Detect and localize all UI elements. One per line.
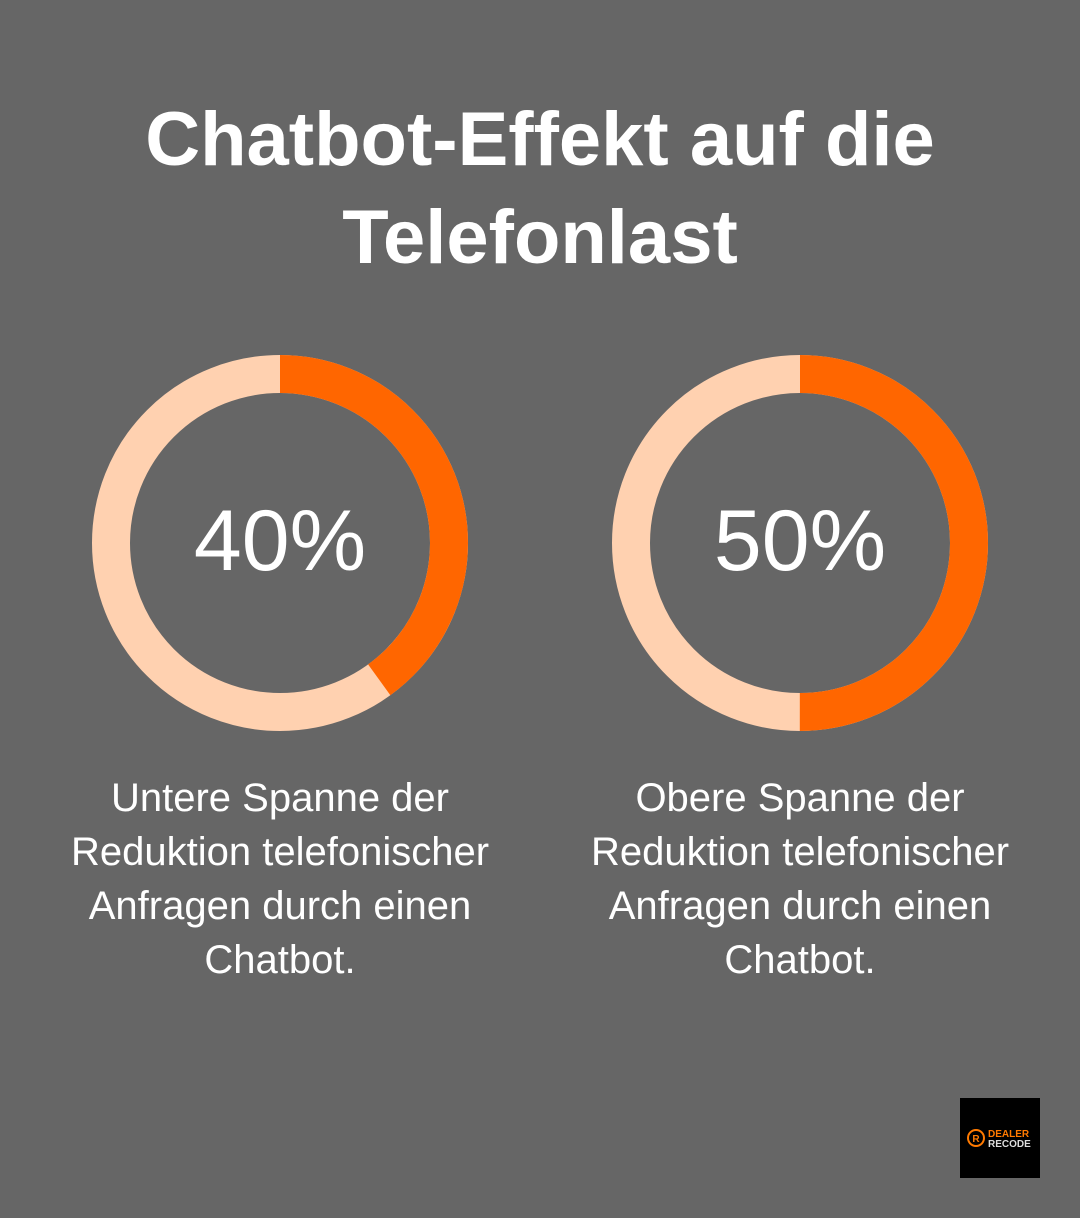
caption right: Reduktion telefonischer bbox=[591, 830, 1009, 874]
caption left bbox=[71, 776, 489, 982]
logo: R bbox=[972, 1134, 980, 1145]
caption right: Obere Spanne der bbox=[635, 776, 965, 820]
caption left: Anfragen durch einen bbox=[89, 884, 471, 928]
caption right bbox=[591, 776, 1009, 982]
caption left: Reduktion telefonischer bbox=[71, 830, 489, 874]
donut: 40%: 40% bbox=[194, 493, 366, 589]
donut: 50% bbox=[612, 355, 988, 731]
donut: 40% bbox=[92, 355, 468, 731]
donut: 50%: 50% bbox=[714, 493, 886, 589]
logo bbox=[960, 1098, 1040, 1178]
caption right: Anfragen durch einen bbox=[609, 884, 991, 928]
logo: DEALER bbox=[988, 1129, 1030, 1140]
caption left: Chatbot. bbox=[204, 938, 356, 982]
caption right: Chatbot. bbox=[724, 938, 876, 982]
title: Telefonlast bbox=[342, 195, 738, 280]
title: Chatbot-Effekt auf die bbox=[145, 97, 935, 182]
caption left: Untere Spanne der bbox=[111, 776, 449, 820]
logo: RECODE bbox=[988, 1139, 1031, 1150]
title bbox=[145, 97, 935, 280]
